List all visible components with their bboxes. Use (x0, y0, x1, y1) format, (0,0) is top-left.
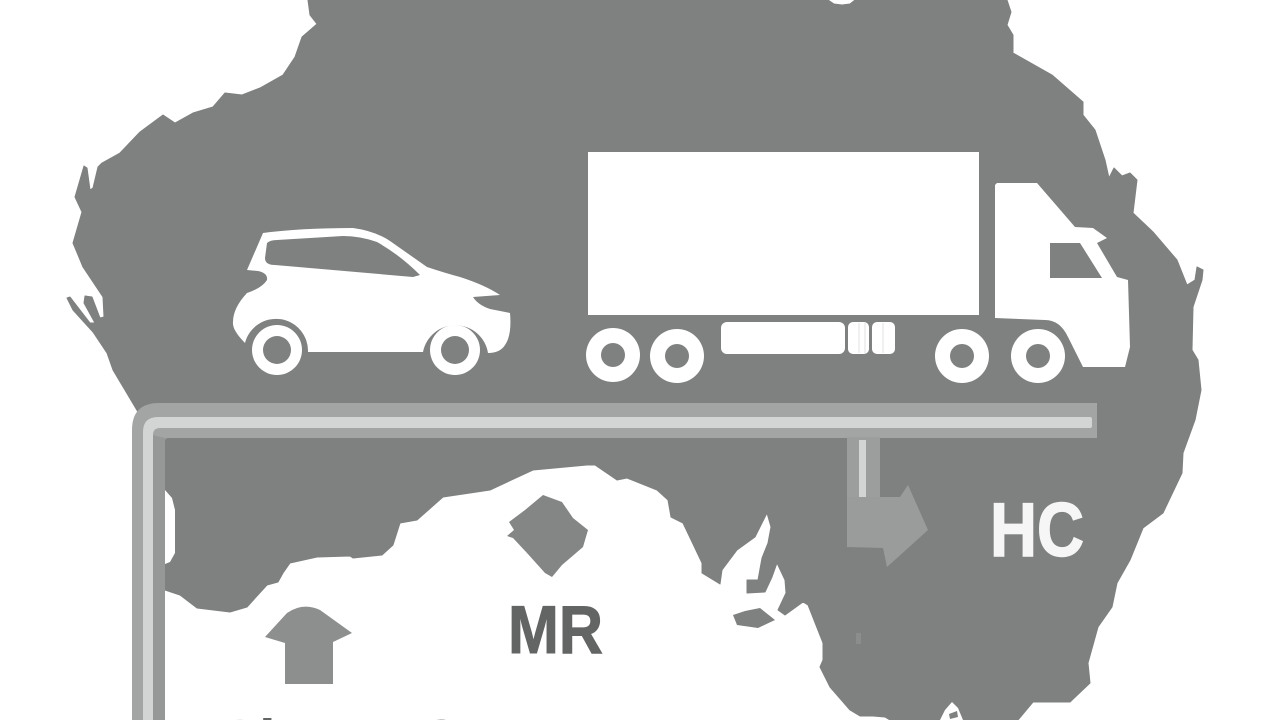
icon: truck (586, 152, 1130, 383)
pipeline frame (132, 403, 1097, 720)
speck on map (856, 633, 861, 644)
white tab on pipeline (165, 490, 175, 564)
label: MR: MR (508, 592, 603, 668)
label: HC: HC (990, 488, 1084, 573)
icon: MR diamond (507, 495, 588, 577)
arrow: HC branch (847, 437, 928, 567)
icon: car (233, 228, 510, 375)
white islet at bottom of map (940, 702, 963, 720)
arrow: up (265, 607, 352, 684)
island: Kangaroo Island (733, 608, 775, 628)
